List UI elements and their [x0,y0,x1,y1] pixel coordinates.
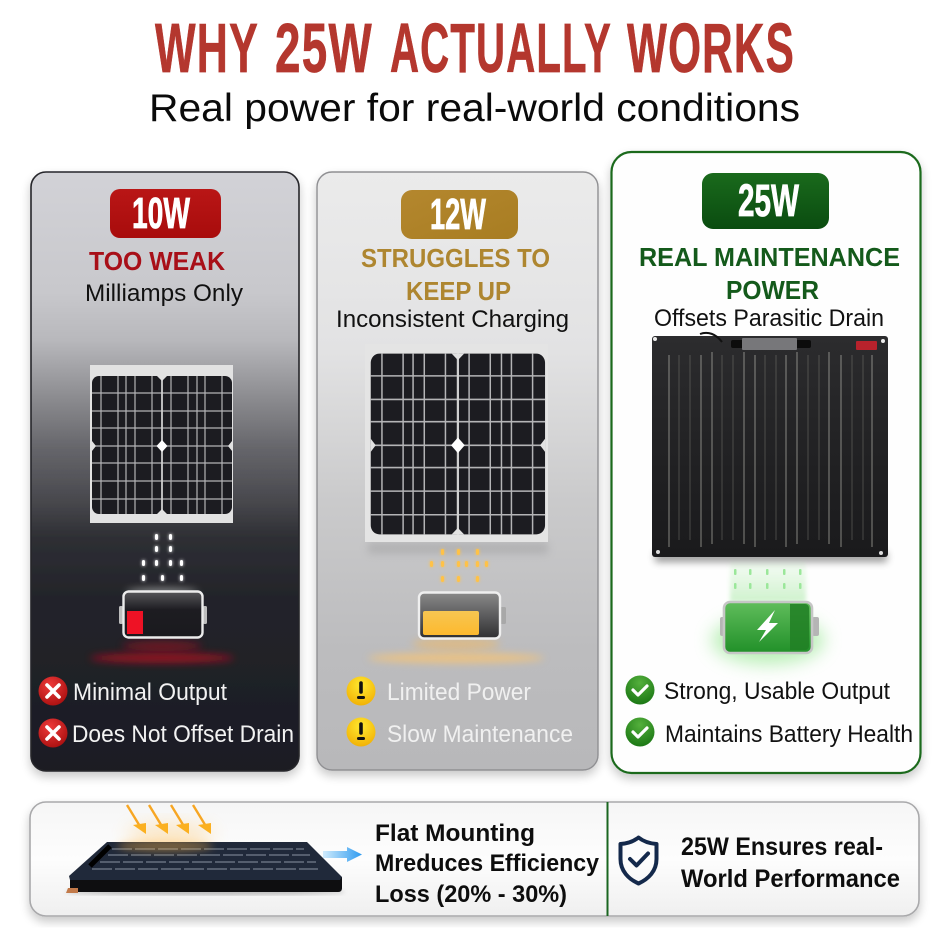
badge: 25W: 25W [738,175,799,226]
list: maintains battery health: Maintains Battery Health [665,721,913,748]
panel: bottom strip [30,802,919,916]
text: 25W ensures performance: World Performance [681,865,900,893]
battery: low red [90,588,234,663]
list: strong usable output: Strong, Usable Output [664,678,890,705]
icon: shield check [620,838,656,884]
heading: real maintenance power [639,242,900,305]
badge: 10W: 10W [132,189,190,238]
list: slow maintenance: Slow Maintenance [387,721,573,748]
subtitle: Real power for real-world conditions [149,87,800,130]
heading: struggles to keep up: STRUGGLES TO [361,243,550,273]
list: limited power [346,676,531,706]
list: limited power: Limited Power [387,679,531,706]
text: flat mounting: Mreduces Efficiency [375,850,600,877]
energy dots: white [142,534,183,581]
panel: 12W struggles [317,172,598,770]
title: 25W [275,9,373,87]
title: ACTUALLY [390,9,612,87]
list: does not offset drain: Does Not Offset Drain [72,721,294,748]
panel: 10W too weak [31,172,299,771]
text: 25W ensures performance [681,833,900,893]
energy dashes: green [730,562,806,602]
solar panel: medium [365,344,548,554]
title [155,9,795,87]
list: minimal output: Minimal Output [73,679,227,706]
panel: 25W real maintenance [612,152,920,773]
subheading: offsets parasitic drain: Offsets Parasitic Drain [654,305,884,332]
text: 25W ensures performance: 25W Ensures real- [681,833,883,861]
solar panel: small [90,365,233,523]
energy dots: amber [430,549,488,582]
badge: 12W: 12W [430,190,486,239]
title: WORKS [627,9,795,87]
battery: half amber [368,592,544,663]
text: flat mounting [375,820,600,908]
heading: real maintenance power: POWER [726,275,819,305]
heading: too weak: TOO WEAK [89,246,225,276]
subheading: milliamps only: Milliamps Only [85,280,243,307]
list: slow maintenance [346,718,573,748]
arrow: blue [323,847,362,862]
illustration: flat mounted panel with sun arrows [65,805,362,895]
battery: full green [712,602,824,664]
text: flat mounting: Flat Mounting [375,820,535,847]
text: flat mounting: Loss (20% - 30%) [375,881,567,908]
solar panel: flexible black [652,333,888,562]
heading: real maintenance power: REAL MAINTENANCE [639,242,900,272]
badge: 25W [702,173,829,229]
heading: struggles to keep up: KEEP UP [406,276,511,306]
subheading: inconsistent charging: Inconsistent Charging [336,306,569,333]
title: WHY [155,9,259,87]
heading: struggles to keep up [361,243,550,306]
